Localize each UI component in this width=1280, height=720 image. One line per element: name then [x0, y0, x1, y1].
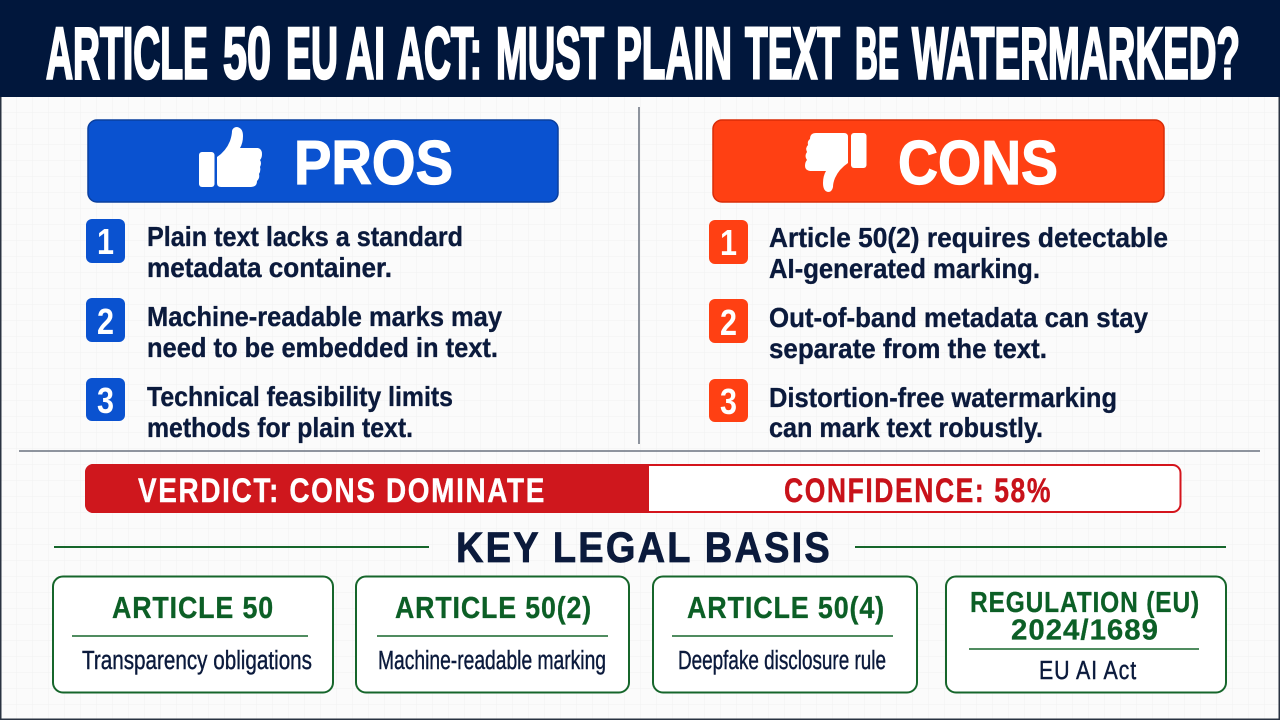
title: BE — [855, 12, 899, 94]
card: regulation (eu) 2024/1689: EU AI Act — [1039, 657, 1137, 685]
cons item 2: separate from the text. — [769, 333, 1047, 364]
card: article 50(2) — [356, 576, 629, 692]
cons item 1: 1 — [720, 222, 737, 263]
cons item 3: can mark text robustly. — [769, 412, 1043, 443]
pros item 1: 1 — [97, 221, 114, 262]
card: article 50(2): Machine-readable marking — [378, 647, 606, 675]
key legal basis heading: KEY LEGAL BASIS — [456, 524, 832, 572]
title banner — [0, 0, 1280, 97]
cons item 1 — [709, 220, 1168, 284]
card: article 50: ARTICLE 50 — [112, 590, 274, 625]
cons item 2: Out-of-band metadata can stay — [769, 302, 1149, 333]
cons item 3: Distortion-free watermarking — [769, 382, 1117, 413]
card: article 50 — [53, 576, 333, 692]
pros item 3 — [86, 378, 453, 443]
column divider — [638, 107, 640, 444]
pros header — [88, 120, 558, 202]
title: MUST — [496, 12, 604, 94]
card: article 50(4) — [653, 576, 917, 692]
title: 50 — [223, 12, 271, 94]
card: regulation (eu) 2024/1689 — [946, 576, 1226, 692]
panel: cons — [709, 120, 1168, 443]
icon: thumbs down — [805, 133, 866, 192]
card: article 50(4): Deepfake disclosure rule — [678, 647, 886, 675]
pros item 2 — [86, 298, 503, 363]
pros item 3: Technical feasibility limits — [147, 381, 453, 412]
title: PLAIN — [616, 12, 732, 94]
panel: pros — [86, 120, 558, 443]
pros item 1: metadata container. — [147, 252, 392, 283]
cons item 2: 2 — [720, 302, 737, 343]
section divider — [19, 450, 1260, 452]
verdict label: VERDICT: CONS DOMINATE — [138, 472, 546, 510]
verdict bar — [85, 464, 1180, 513]
card: article 50(4): ARTICLE 50(4) — [687, 590, 885, 625]
title: TEXT — [745, 12, 840, 94]
cons item 1: Article 50(2) requires detectable — [769, 222, 1168, 253]
pros item 2: Machine-readable marks may — [147, 301, 503, 332]
pros item 3: methods for plain text. — [147, 412, 413, 443]
card: article 50(2): ARTICLE 50(2) — [395, 590, 592, 625]
cons item 3: 3 — [720, 381, 737, 422]
title: EU — [286, 12, 338, 94]
pros item 1 — [86, 219, 463, 283]
title: ARTICLE — [46, 12, 208, 94]
cons header — [713, 120, 1164, 202]
title: AI — [346, 12, 385, 94]
cons item 1: AI-generated marking. — [769, 253, 1040, 284]
pros label: PROS — [294, 129, 453, 198]
cons item 2 — [709, 299, 1149, 364]
cons item 3 — [709, 379, 1117, 443]
card: article 50: Transparency obligations — [82, 647, 312, 675]
pros item 1: Plain text lacks a standard — [147, 221, 463, 252]
cons label: CONS — [898, 129, 1058, 198]
title: ACT: — [397, 12, 482, 94]
card: regulation (eu) 2024/1689: REGULATION (EU) — [970, 587, 1200, 619]
pros item 2: 2 — [97, 301, 114, 342]
pros item 2: need to be embedded in text. — [147, 332, 498, 363]
card: regulation (eu) 2024/1689: 2024/1689 — [1011, 614, 1159, 646]
confidence value: CONFIDENCE: 58% — [784, 472, 1052, 510]
pros item 3: 3 — [97, 380, 114, 421]
icon: thumbs up — [199, 127, 262, 187]
